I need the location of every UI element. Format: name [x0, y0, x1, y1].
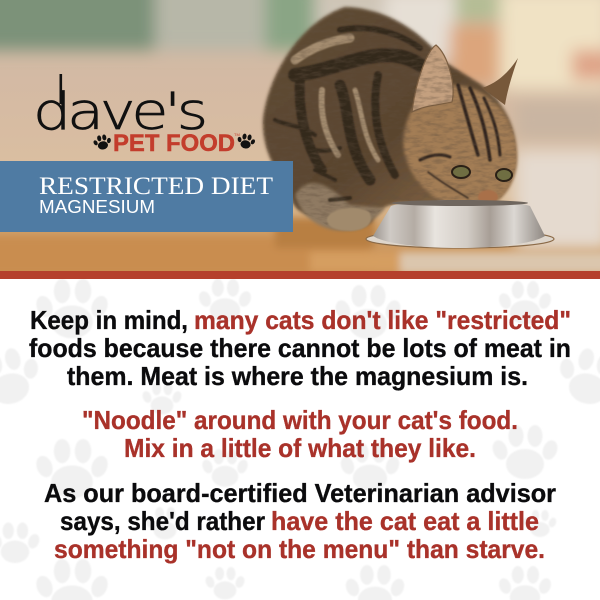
red divider bar [0, 271, 600, 279]
trademark: TM [234, 132, 240, 137]
blurred background wall [0, 0, 600, 250]
cat ears [412, 45, 453, 112]
paw print background pattern [0, 279, 600, 600]
photo: cat eating from a bowl [0, 0, 600, 276]
paragraph 1: Keep in mind, [30, 305, 188, 335]
paragraph 3: have the cat eat a little [271, 506, 539, 536]
paragraph 1: them. Meat is where the magnesium is. [67, 361, 528, 391]
paragraph 3: something "not on the menu" than starve. [54, 534, 545, 564]
paragraph 1 [29, 305, 571, 391]
logo d ascender [60, 74, 62, 104]
paragraph 1: foods because there cannot be lots of meat in [29, 333, 571, 363]
wood floor highlight [0, 218, 600, 276]
paragraph 3: says, she'd rather [60, 506, 265, 536]
banner title: RESTRICTED DIET [39, 173, 273, 200]
cat head [403, 85, 517, 207]
cat face markings [420, 85, 500, 198]
logo wordmark: dave's: dave's [33, 83, 204, 142]
brand logo [33, 74, 257, 157]
cat nose [478, 190, 498, 200]
paragraph 2 [82, 405, 518, 463]
paragraph 1: many cats don't like "restricted" [194, 305, 571, 335]
tabby stripes [275, 28, 420, 200]
banner subtitle: MAGNESIUM [39, 197, 155, 217]
icon: left paw [92, 133, 113, 151]
paragraph 2: "Noodle" around with your cat's food. [82, 405, 518, 435]
fur texture [263, 7, 516, 230]
icon: right paw [236, 132, 257, 150]
cat paw [327, 208, 371, 231]
banner: restricted diet magnesium [0, 161, 293, 232]
logo wordmark: pet food: PET FOOD [113, 130, 235, 157]
cat eyes [452, 166, 470, 178]
cat body [263, 7, 516, 230]
metal bowl [366, 200, 554, 248]
paragraph 3 [44, 478, 556, 564]
paragraph 3: As our board-certified Veterinarian advisor [44, 478, 556, 508]
paragraph 2: Mix in a little of what they like. [124, 433, 476, 463]
